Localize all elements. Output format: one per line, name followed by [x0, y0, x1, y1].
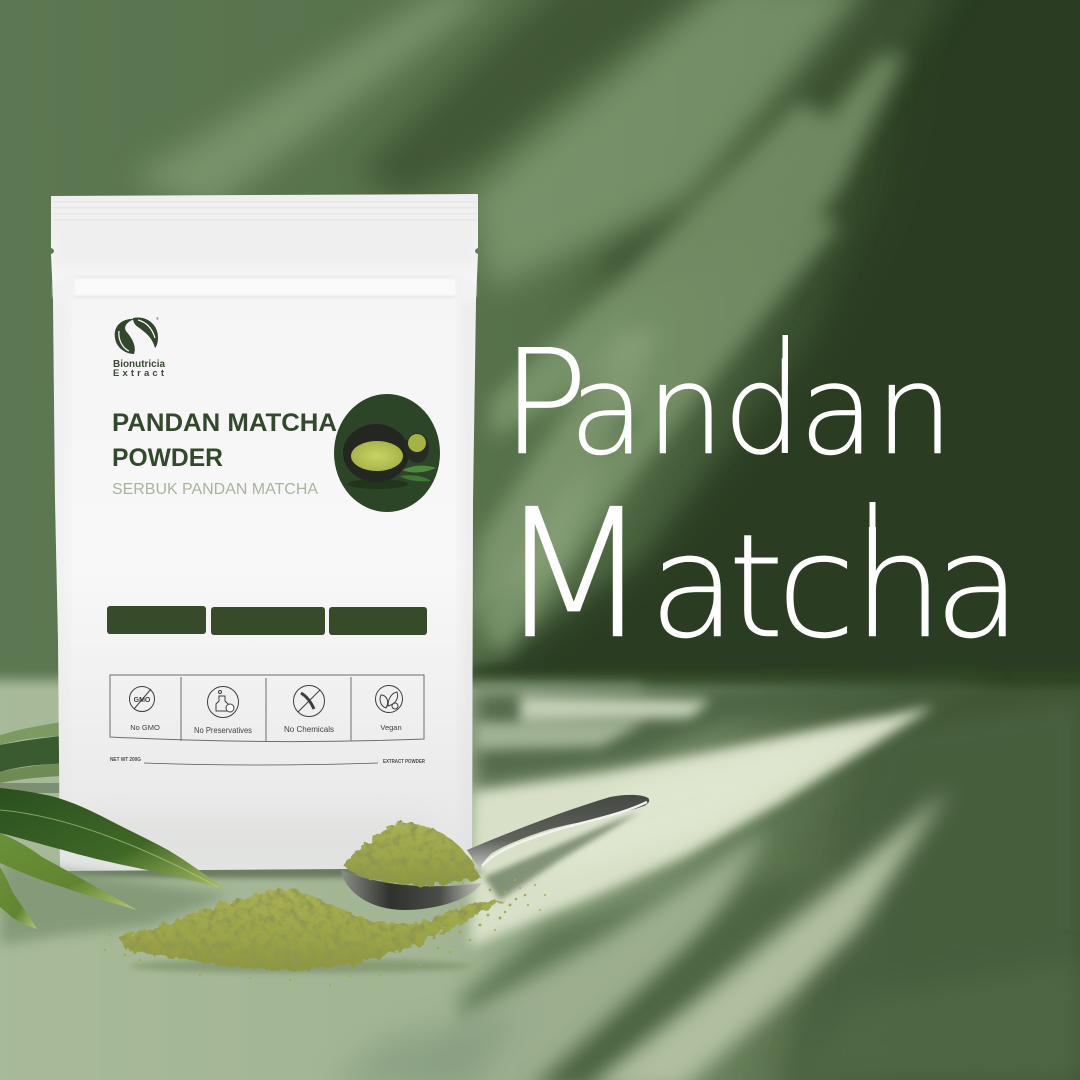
spoon bowl [341, 870, 482, 910]
spoon shadow [484, 812, 640, 900]
pouch zipper seal [52, 201, 477, 220]
dark band two [530, 870, 830, 1080]
icon: no GMO [130, 686, 154, 712]
product pouch [51, 194, 478, 871]
claims table [110, 675, 424, 742]
matcha powder on spoon [345, 822, 480, 885]
icon: no chemicals [294, 686, 324, 716]
leaf upper [0, 788, 223, 888]
bottom mid shadow [330, 1010, 520, 1080]
net weight line: EXTRACT POWDER [383, 759, 425, 765]
matcha powder pile on table [104, 879, 546, 986]
spoon handle [467, 795, 649, 870]
scattered powder [104, 879, 546, 986]
lower right lift [780, 960, 1080, 1080]
dark bands [460, 760, 878, 1030]
net weight line: NET WT 200G [110, 757, 141, 763]
logo [113, 316, 165, 379]
label: no GMO: No GMO [130, 723, 160, 732]
icon: vegan [376, 686, 402, 712]
icon: no preservatives [208, 686, 238, 718]
second faint light wedge [400, 828, 770, 1080]
label: no preservatives: No Preservatives [194, 726, 252, 735]
net weight line [110, 757, 425, 765]
leaf lower [0, 867, 37, 929]
label: vegan: Vegan [380, 723, 402, 732]
foreground pandan leaves [0, 788, 223, 929]
back table shadows [474, 684, 1080, 1080]
three dark label bars [107, 606, 427, 635]
light streaks [130, 0, 875, 290]
logo mark: ® [156, 316, 159, 321]
title: Matcha: Matcha [497, 471, 1022, 678]
pouch body [51, 194, 478, 871]
spoon [341, 795, 649, 910]
icon: no GMO: GMO [134, 697, 151, 704]
label: no chemicals: No Chemicals [284, 725, 334, 734]
product name line two: POWDER [112, 444, 223, 472]
table surface with light streaks [0, 668, 1080, 1080]
pouch shadow [55, 866, 485, 878]
pouch fold [53, 274, 476, 298]
circle photo: matcha bowl [334, 394, 440, 512]
pouch shading [52, 225, 476, 865]
background wall with palm shadows [0, 0, 1080, 720]
logo text: Bionutricia [113, 358, 165, 370]
table top shade [470, 668, 1080, 684]
dark regions [470, 0, 1080, 720]
title: Pandan: Pandan [501, 319, 954, 488]
product name: PANDAN MATCHA [112, 409, 337, 437]
leaf shadow on table [0, 860, 230, 945]
leaf middle [0, 833, 137, 910]
subtitle: SERBUK PANDAN MATCHA [112, 481, 319, 498]
main light wedge [470, 706, 935, 947]
third light wedge [590, 790, 948, 1080]
small light bars [474, 682, 711, 750]
logo: Extract [113, 368, 165, 379]
background pandan leaves behind pouch [0, 722, 62, 793]
